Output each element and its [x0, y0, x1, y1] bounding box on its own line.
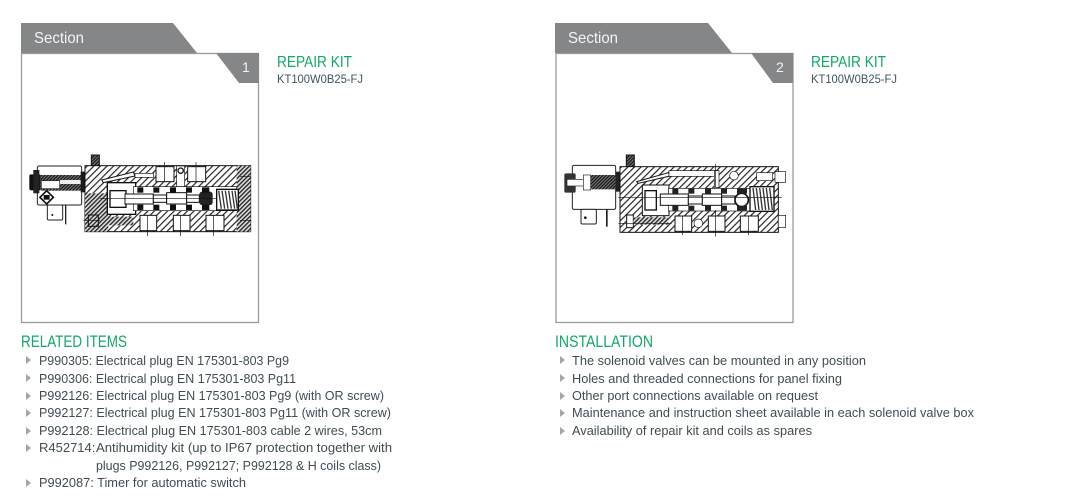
repair kit label 2: [811, 54, 897, 86]
section number badge 2: [751, 53, 793, 83]
heading: related items: RELATED ITEMS: [21, 332, 127, 351]
list: related items: P992127: Electrical plug EN 175301-803 Pg11 (with OR screw): [39, 405, 391, 420]
drawing frame 2: [556, 54, 793, 322]
section tab 1: [21, 23, 197, 53]
panel: related items: [21, 332, 392, 490]
repair kit label 1: [277, 54, 363, 86]
list: installation: The solenoid valves can be mounted in any position: [572, 353, 866, 368]
panel: section 2: [555, 23, 897, 322]
section tab 2: Section: [568, 30, 618, 47]
list: installation: Holes and threaded connections for panel fixing: [572, 371, 842, 386]
list: related items: [26, 353, 392, 490]
section number badge 2: 2: [776, 59, 784, 75]
list: related items: Antihumidity kit (up to IP67 protection together with: [96, 440, 392, 455]
repair kit label 2: REPAIR KIT: [811, 54, 886, 71]
drawing frame 1: [22, 54, 258, 322]
section tab 2: [555, 23, 732, 53]
list: installation: [560, 353, 974, 438]
valve cross-section drawing 2: [564, 155, 786, 237]
repair kit label 2: KT100W0B25-FJ: [811, 72, 897, 86]
list: related items: P990305: Electrical plug EN 175301-803 Pg9: [39, 353, 289, 368]
list: installation: Availability of repair kit and coils as spares: [572, 423, 812, 438]
section number badge 1: [216, 53, 259, 83]
panel: installation: [555, 332, 974, 438]
section tab 1: Section: [34, 30, 84, 47]
list: related items: P992126: Electrical plug EN 175301-803 Pg9 (with OR screw): [39, 388, 384, 403]
list: related items: P992087: Timer for automatic switch: [39, 475, 246, 490]
heading: installation: INSTALLATION: [555, 332, 653, 351]
section number badge 1: 1: [242, 59, 250, 75]
list: related items: P990306: Electrical plug EN 175301-803 Pg11: [39, 371, 296, 386]
list: related items: R452714:: [39, 440, 95, 455]
list: installation: Other port connections available on request: [572, 388, 818, 403]
list: installation: Maintenance and instruction sheet available in each solenoid valve box: [572, 405, 974, 420]
repair kit label 1: REPAIR KIT: [277, 54, 352, 71]
list: related items: P992128: Electrical plug EN 175301-803 cable 2 wires, 53cm: [39, 423, 382, 438]
panel: section 1: [21, 23, 363, 322]
valve cross-section drawing 1: [29, 155, 251, 236]
list: related items: plugs P992126, P992127; P992128 & H coils class): [96, 458, 381, 473]
repair kit label 1: KT100W0B25-FJ: [277, 72, 363, 86]
